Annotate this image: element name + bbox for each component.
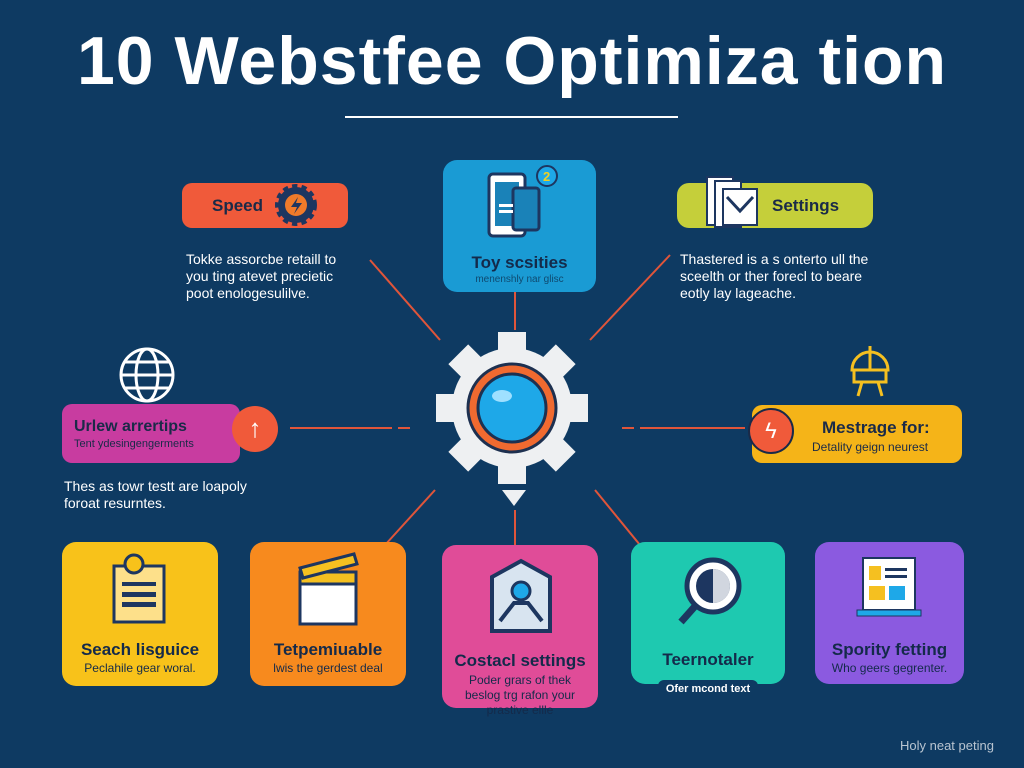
- pill: right: Mestrage for:: [822, 418, 930, 437]
- title: 10 Webstfee Optimiza tion: [77, 23, 947, 99]
- text: speed desc: poot enologesulilve.: [186, 285, 310, 301]
- icon: globe: [120, 348, 174, 402]
- card: purple: [815, 542, 964, 684]
- icon: tablet: [488, 165, 558, 238]
- card: clapper: Tetpemiuable: [274, 640, 382, 659]
- pill: right: [752, 405, 962, 463]
- connector lines: [290, 255, 745, 545]
- icon: bolt circle: ϟ: [765, 418, 777, 443]
- tag: teal caption: [658, 680, 758, 698]
- text: left desc: foroat resurntes.: [64, 495, 166, 511]
- icon: helmet: [850, 346, 890, 396]
- icon: tablet: 2: [543, 169, 550, 184]
- pill: left: Tent ydesingengerments: [74, 438, 194, 450]
- icon: documents: [706, 176, 758, 228]
- tag: teal caption: Ofer mcond text: [666, 683, 750, 695]
- card: search teal: Teernotaler: [662, 650, 754, 669]
- icon: gear bolt: [275, 184, 317, 226]
- card: top center: Toy scsities: [471, 253, 568, 272]
- card: clapper: [250, 542, 406, 686]
- text: left desc: [64, 478, 247, 511]
- text: speed desc: Tokke assorcbe retaill to: [186, 251, 336, 267]
- pill: left: Urlew arrertips: [74, 418, 187, 435]
- footer note: Holy neat peting: [900, 738, 994, 753]
- pill: right: Detality geign neurest: [812, 440, 928, 454]
- card: clapper: lwis the gerdest deal: [273, 661, 383, 675]
- card: search: Peclahile gear woral.: [84, 661, 196, 675]
- text: speed desc: [186, 251, 336, 301]
- card: search teal: [631, 542, 785, 684]
- text: prastive ellle: [487, 703, 553, 717]
- pill: speed: [182, 183, 348, 228]
- pill: settings: [677, 183, 873, 228]
- text: settings desc: sceelth or ther forecl to beare: [680, 268, 862, 284]
- card: purple: Who geers gegrenter.: [832, 661, 947, 675]
- icon: bolt circle: [748, 408, 794, 454]
- central gear: [436, 332, 588, 484]
- text: settings desc: eotly lay lageache.: [680, 285, 796, 301]
- pill: left: [62, 404, 240, 463]
- card: search: Seach lisguice: [81, 640, 199, 659]
- triangle: [502, 490, 526, 506]
- card: contact settings: [442, 545, 598, 708]
- icon: up arrow circle: ↑: [248, 413, 262, 443]
- card: purple: Spority fetting: [832, 640, 947, 659]
- text: left desc: Thes as towr testt are loapoly: [64, 478, 247, 494]
- card: contact settings: beslog trg rafon your: [465, 688, 575, 702]
- pill: speed: Speed: [212, 196, 263, 215]
- pill: settings: Settings: [772, 196, 839, 215]
- card: top center: menenshly nar glisc: [475, 274, 564, 285]
- card: search: [62, 542, 218, 686]
- card: contact settings: Poder grars of thek: [469, 673, 571, 687]
- text: settings desc: [680, 251, 868, 301]
- card: top center: [443, 160, 596, 292]
- card: contact settings: Costacl settings: [454, 651, 586, 670]
- text: speed desc: you ting atevet precietic: [186, 268, 333, 284]
- icon: up arrow circle: [232, 406, 278, 452]
- text: settings desc: Thastered is a s onterto ull the: [680, 251, 868, 267]
